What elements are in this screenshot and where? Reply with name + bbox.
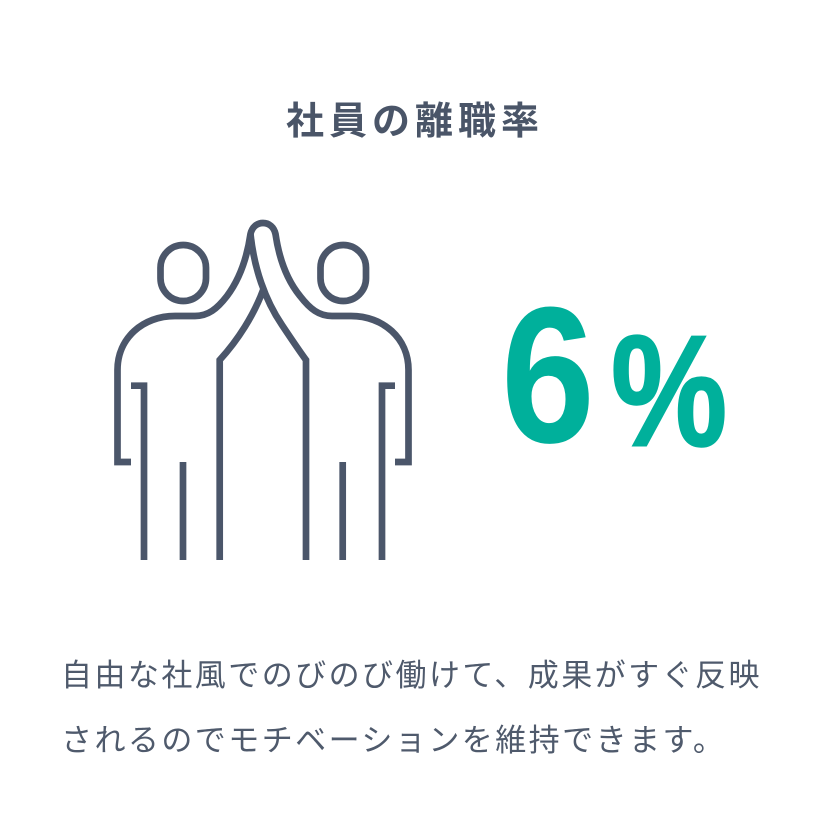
body outline with raised arms [118,223,408,462]
description text: されるのでモチベーションを維持できます。 [61,723,726,758]
right leg divider [339,462,346,560]
number 6: 6 [501,267,595,484]
left inner arm and side [131,386,144,560]
left leg divider [180,462,186,560]
right head [320,245,366,301]
title: 社員の離職率 [286,101,544,143]
percent sign: % [610,303,727,480]
description text [61,658,762,758]
inner raised arm right [250,234,306,560]
inner raised arm left [220,289,264,560]
description text: 自由な社風でのびのび働けて、成果がすぐ反映 [61,658,762,693]
left head [160,245,206,301]
right inner arm and side [382,386,395,560]
